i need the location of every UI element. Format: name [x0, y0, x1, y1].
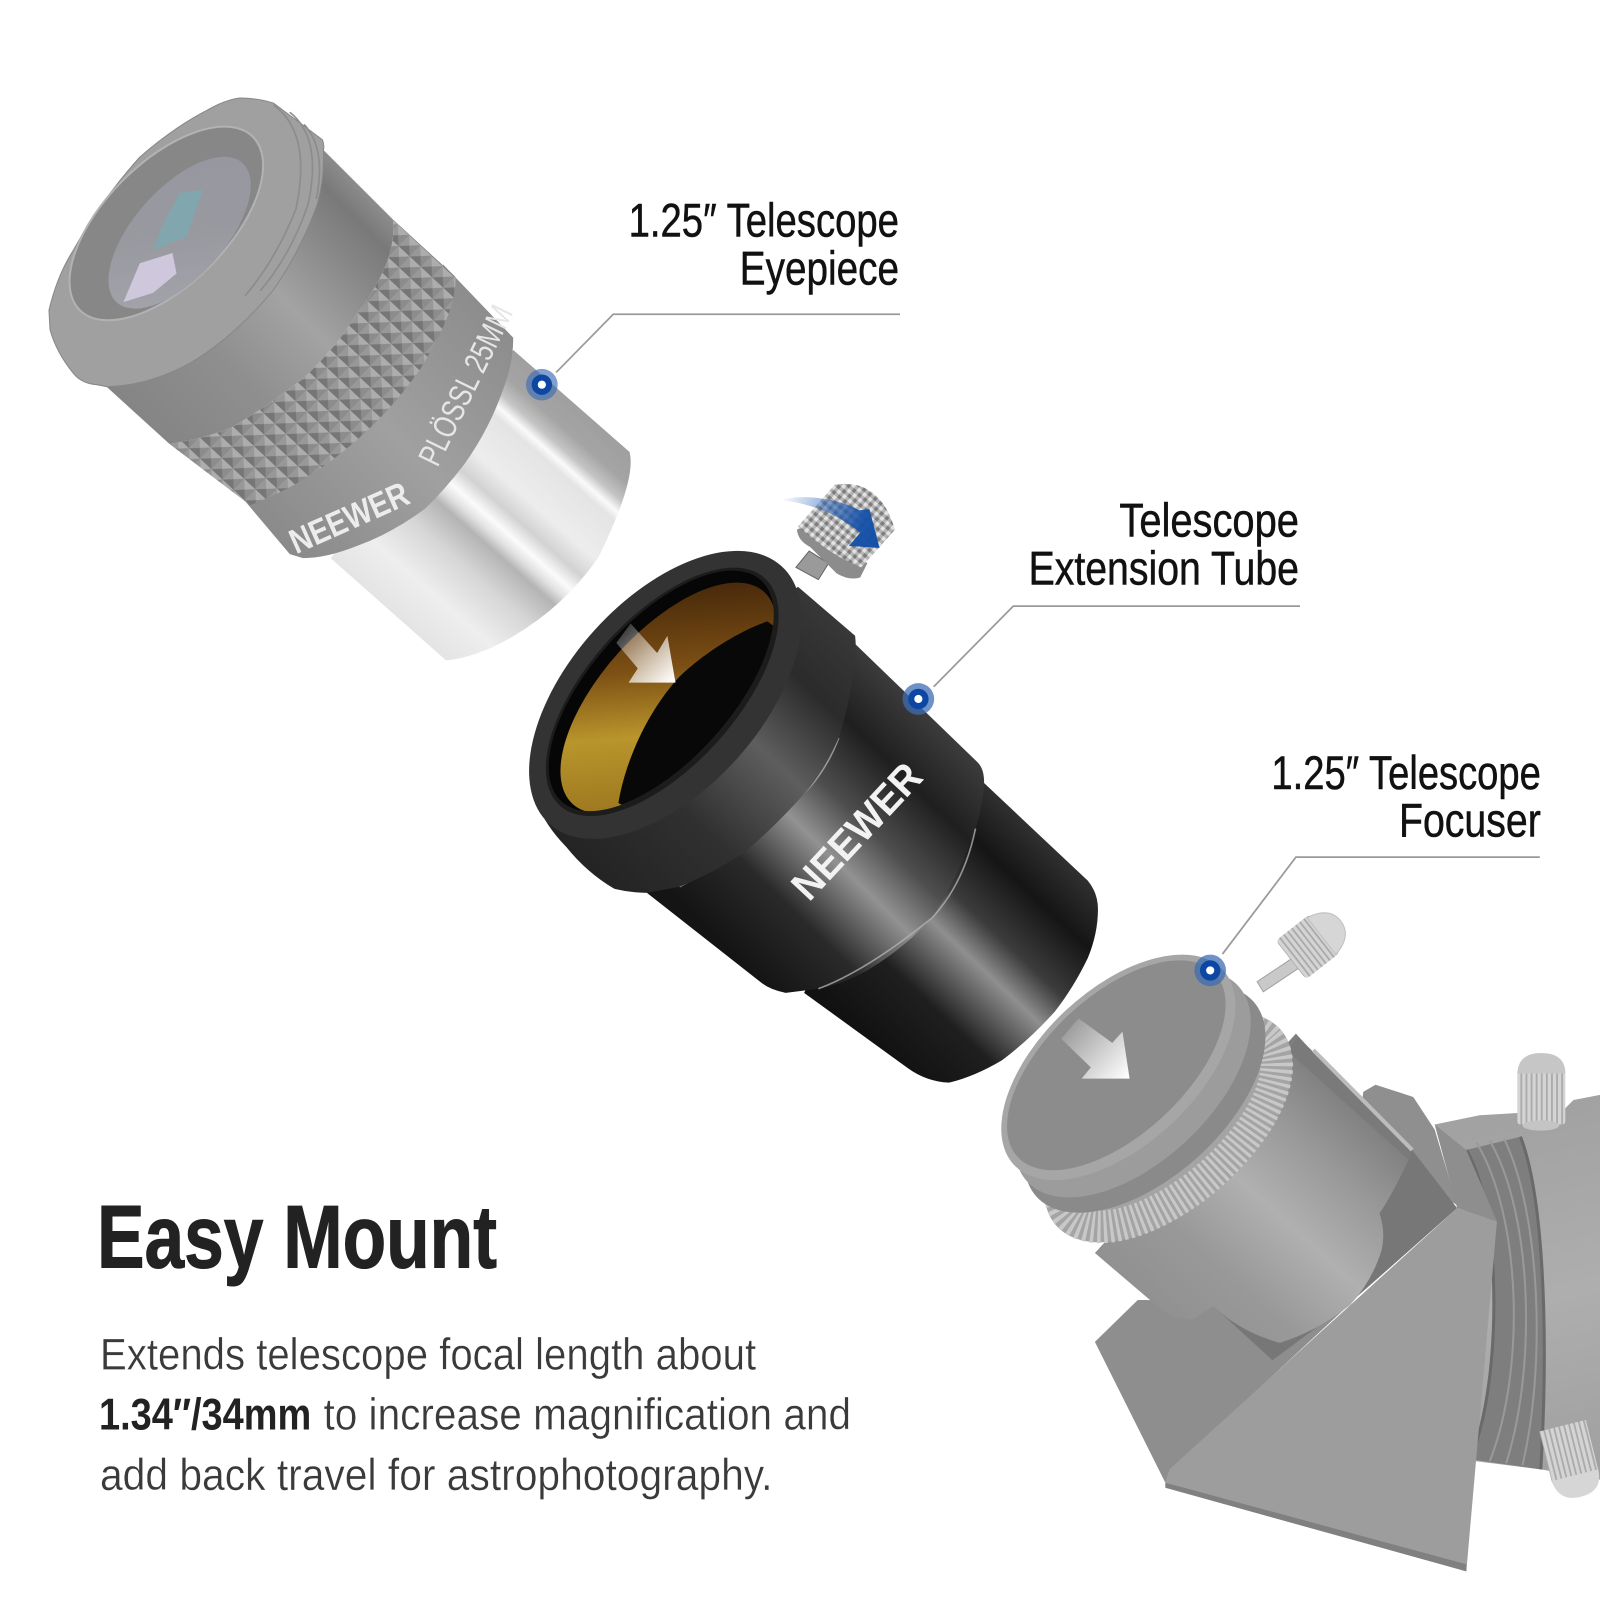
prism main face — [1165, 1208, 1497, 1571]
diagonal housing body — [1435, 1095, 1600, 1480]
extension tube marker — [903, 683, 934, 715]
callout: eyepiece — [526, 195, 900, 401]
extension tube leader line — [934, 606, 1300, 687]
focuser heading — [1271, 747, 1541, 847]
tube flange — [536, 587, 856, 893]
tube brand text: NEEWER — [782, 754, 931, 909]
focuser illustration — [961, 902, 1600, 1571]
cylinder top dark strip — [1288, 1037, 1412, 1160]
focuser cylinder — [1095, 1034, 1409, 1343]
housing threaded band — [1466, 1137, 1544, 1469]
tube seam highlight — [680, 738, 976, 989]
tube rim inner edge — [504, 528, 820, 855]
eyepiece brand text: NEEWER — [284, 475, 415, 562]
eyepiece lens — [83, 133, 276, 332]
eyepiece leader line — [556, 314, 900, 372]
extension tube heading: Telescope — [1119, 495, 1299, 547]
eyepiece model text: PLÖSSL 25MM — [411, 299, 520, 471]
tube front rim — [478, 502, 853, 888]
prism lower side — [1095, 1300, 1352, 1483]
description text: add back travel for astrophotography. — [100, 1449, 772, 1500]
focuser knurled ring — [1004, 970, 1333, 1285]
extension tube heading — [1029, 495, 1299, 595]
focuser leader line — [1222, 857, 1540, 954]
eyepiece silver barrel — [331, 350, 631, 660]
eyepiece knurled ring — [169, 219, 455, 505]
eyepiece rubber eyecup — [49, 98, 324, 387]
top housing knob — [1517, 1053, 1565, 1131]
cylinder top light strip — [1313, 1050, 1412, 1150]
eyepiece dark barrel — [102, 150, 393, 444]
tube white arrow — [616, 623, 676, 683]
focuser marker — [1194, 955, 1226, 986]
focuser heading: 1.25″ Telescope — [1271, 747, 1541, 799]
eyecup inner recess — [36, 94, 296, 353]
description text — [99, 1328, 851, 1500]
eyepiece engraved band — [240, 264, 513, 558]
focuser front face rim — [961, 913, 1276, 1221]
focuser front face — [970, 923, 1262, 1208]
blue rotation arrow — [781, 497, 880, 548]
lens reflection pink — [123, 253, 177, 302]
prism base block — [1435, 1124, 1497, 1221]
description text: Extends telescope focal length about — [100, 1328, 757, 1379]
focuser screw stem — [1257, 957, 1300, 992]
black inner bore — [618, 621, 773, 805]
shadow collar — [1213, 1043, 1457, 1360]
bottom housing knob — [1539, 1420, 1600, 1503]
focuser ring lip — [974, 928, 1291, 1239]
tube rear section — [804, 783, 1098, 1083]
brass interior — [560, 582, 774, 812]
prism upper face — [1357, 1085, 1457, 1205]
eyepiece illustration — [36, 94, 631, 660]
callout: focuser — [1194, 747, 1541, 986]
focuser white arrow — [1061, 1018, 1130, 1079]
callout: extension tube — [903, 495, 1300, 715]
focuser screw knob — [1276, 902, 1356, 979]
prism bottom edge — [1165, 1483, 1466, 1571]
tube thumb screw knob — [798, 484, 895, 567]
title: Easy Mount — [97, 1187, 497, 1286]
tube opening — [548, 570, 774, 812]
tube thumb screw stem — [796, 551, 829, 580]
eyepiece heading: 1.25″ Telescope — [629, 195, 899, 247]
eyecup ridges — [245, 105, 320, 296]
tube middle section — [647, 644, 984, 993]
tube thumb screw base — [797, 520, 867, 578]
lens reflection teal — [153, 190, 203, 250]
eyepiece marker — [526, 369, 558, 401]
description text: 1.34″/34mm — [99, 1389, 311, 1440]
eyepiece heading: Eyepiece — [740, 243, 899, 295]
extension tube illustration — [478, 484, 1098, 1083]
description text: to increase magnification and — [323, 1389, 851, 1440]
eyepiece heading — [629, 195, 899, 295]
focuser ring groove — [984, 943, 1306, 1255]
focuser heading: Focuser — [1399, 795, 1541, 847]
extension tube heading: Extension Tube — [1029, 543, 1299, 595]
